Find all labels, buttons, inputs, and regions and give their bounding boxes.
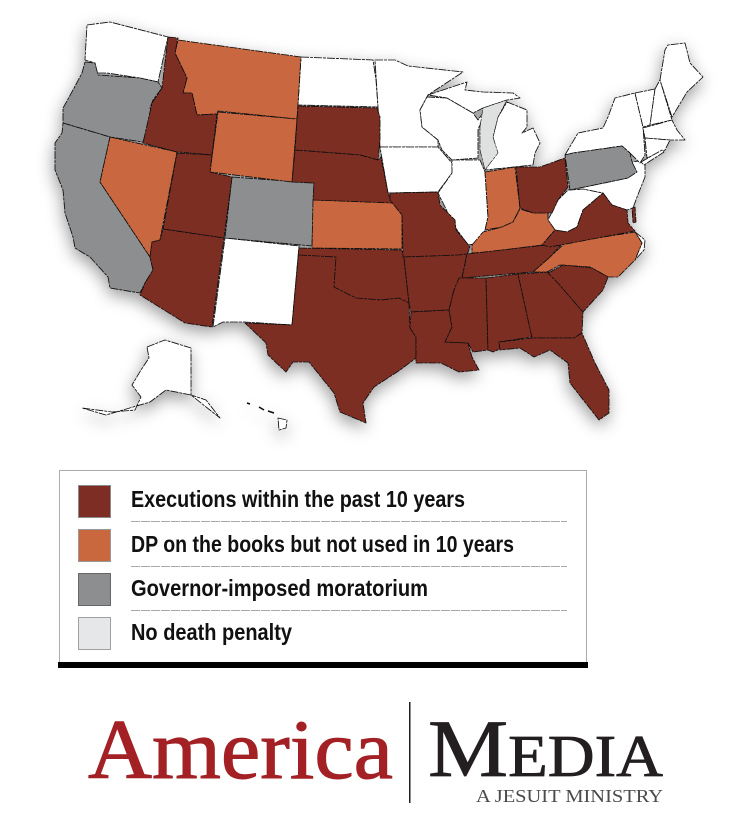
Alaska [82,340,220,418]
lake michigan [480,100,507,170]
legend item: not used [78,530,514,562]
logo tagline: A JESUIT MINISTRY [476,786,663,806]
legend item: not used: DP on the books but not used in 10 years [131,531,514,557]
states: no death penalty [82,22,703,430]
states: governor-imposed moratorium [55,62,637,293]
map: US states by death penalty status [55,22,703,430]
logo: America Media [88,702,663,806]
Hawaiian island chain [247,403,274,413]
logo wordmark: Media: MEDIA [428,703,663,794]
Hawaii [278,418,287,430]
logo divider [409,702,410,803]
legend panel [58,470,588,668]
legend item: no death penalty [78,618,292,650]
legend item: no death penalty: No death penalty [131,619,292,645]
states: executions within the past 10 years [140,37,636,423]
legend item: executions [78,486,465,518]
legend item: moratorium: Governor-imposed moratorium [131,575,428,601]
legend item: executions: Executions within the past 10 years [131,486,465,512]
logo wordmark: America: America [88,703,393,797]
legend item: moratorium [78,574,428,606]
states: death penalty not used in 10 years [100,40,642,277]
